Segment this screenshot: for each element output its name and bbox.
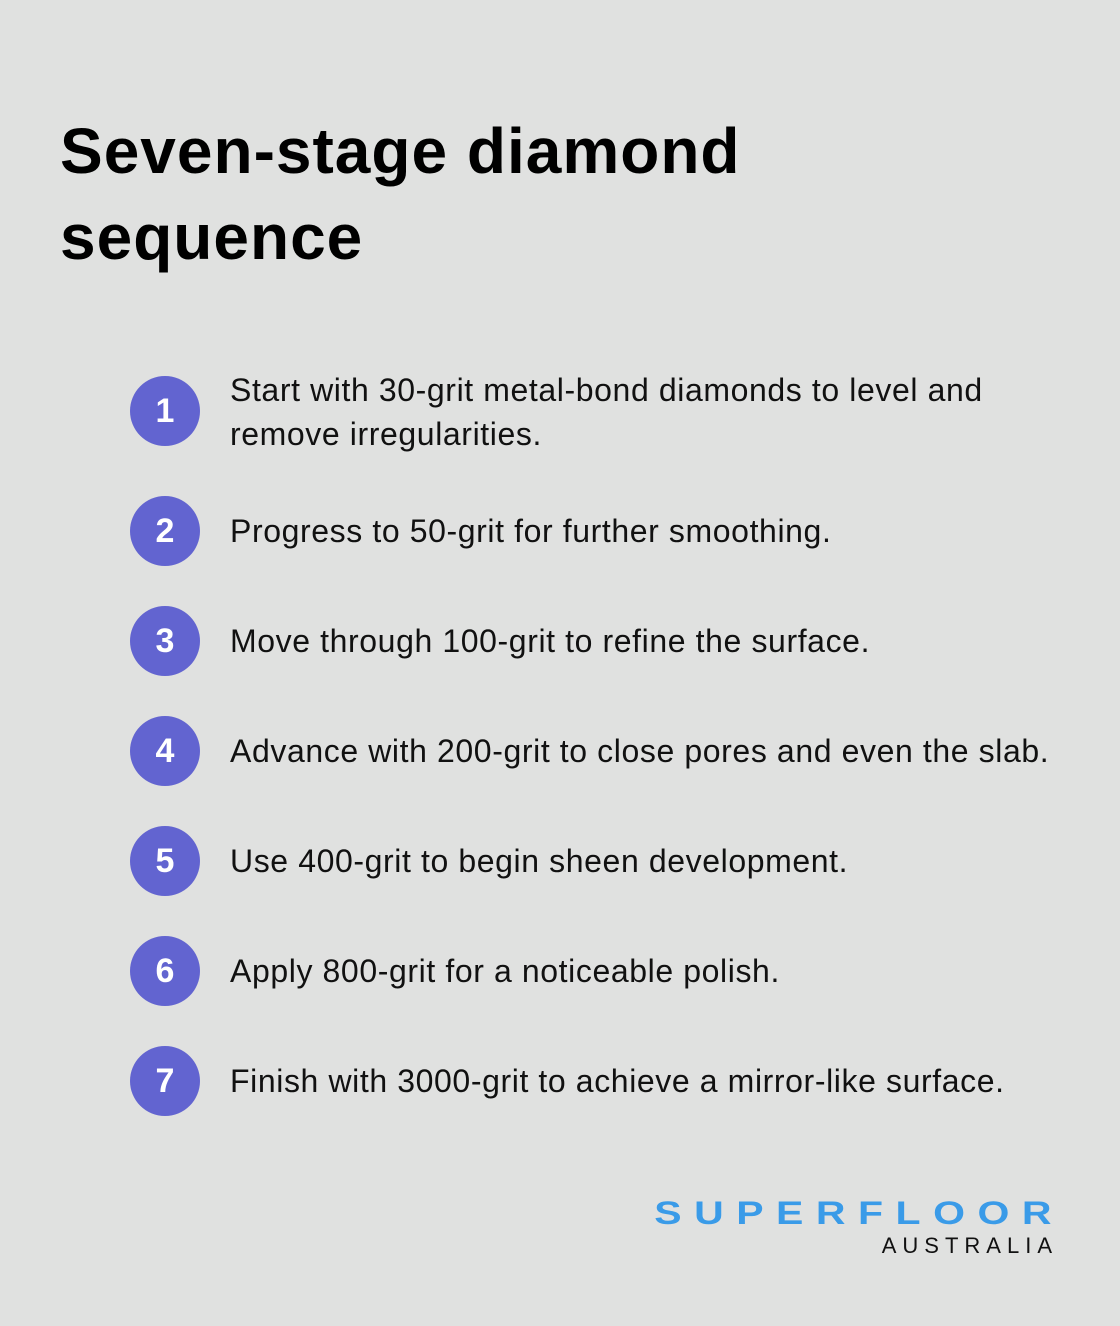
step 7: Finish with 3000-grit to achieve a mirror-like surface. [230,1063,1005,1099]
step 7 [130,1046,1005,1116]
step 1: 1 [156,392,174,430]
step 7: 7 [156,1062,174,1100]
step 4: 4 [156,732,174,770]
step 5 [130,826,848,896]
step 5: 5 [156,842,174,880]
step 2: 2 [156,512,174,550]
title: Seven-stage diamond [60,115,740,187]
logo: SUPERFLOOR [654,1194,1064,1231]
title: sequence [60,201,363,273]
step 2 [130,496,831,566]
step 6: 6 [156,952,174,990]
step 3 [130,606,870,676]
logo: AUSTRALIA [882,1233,1058,1258]
step 3: Move through 100-grit to refine the surface. [230,623,870,659]
step 1: remove irregularities. [230,416,542,452]
step 6 [130,936,780,1006]
logo [654,1194,1064,1258]
step 4: Advance with 200-grit to close pores and even the slab. [230,733,1049,769]
title [60,115,740,273]
step 1 [130,372,983,452]
step 2: Progress to 50-grit for further smoothing. [230,513,831,549]
step 5: Use 400-grit to begin sheen development. [230,843,848,879]
step 6: Apply 800-grit for a noticeable polish. [230,953,780,989]
step 1: Start with 30-grit metal-bond diamonds to level and [230,372,983,408]
step 4 [130,716,1049,786]
step 3: 3 [156,622,174,660]
